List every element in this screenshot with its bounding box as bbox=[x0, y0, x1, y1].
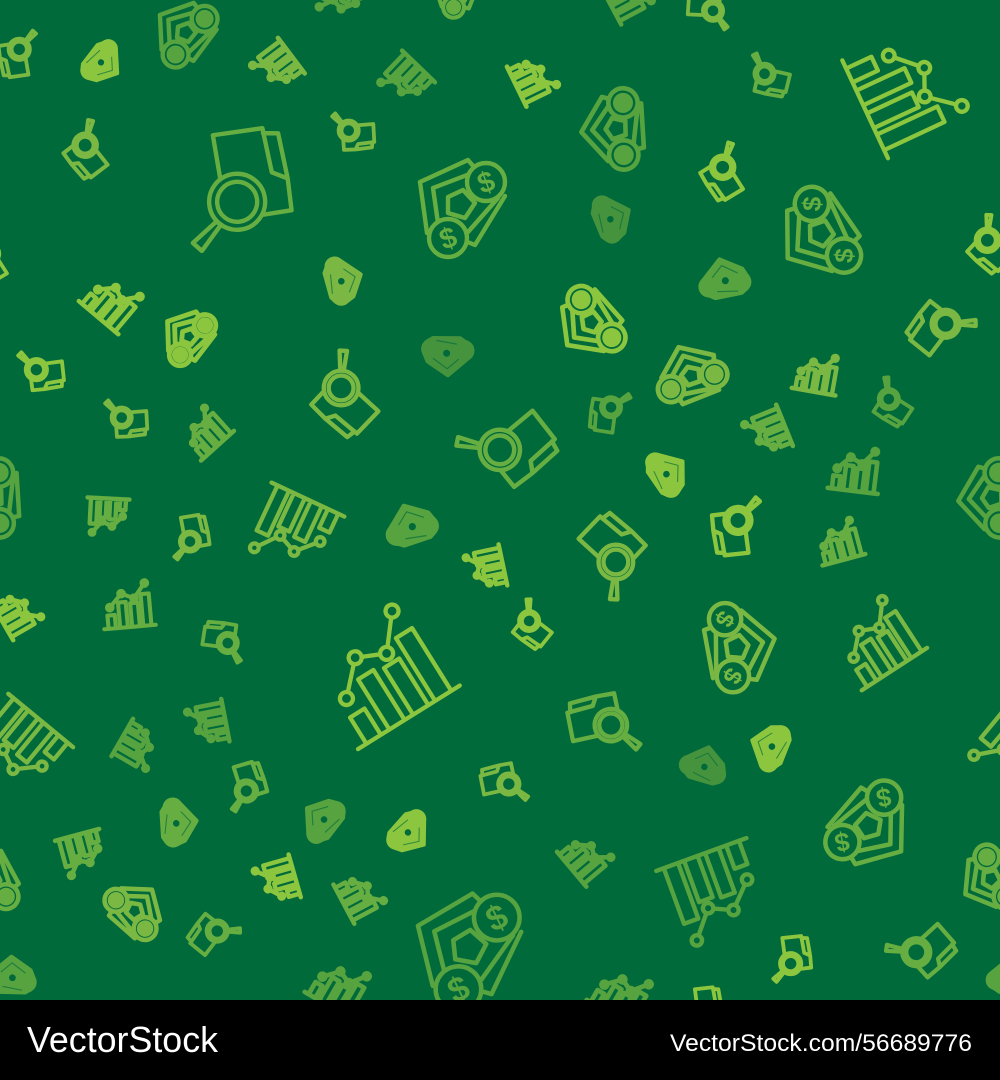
icon: folder search bbox=[686, 0, 731, 30]
icon: money shield bbox=[155, 0, 219, 71]
icon: bar chart bbox=[557, 826, 617, 887]
icon: bar chart large bbox=[302, 596, 460, 749]
icon: bar chart bottom bbox=[305, 951, 375, 1019]
icon: folder search bbox=[0, 30, 41, 78]
icon: money shield edge right bbox=[949, 451, 1000, 547]
icon: money shield large bbox=[420, 160, 505, 257]
icon: money shield bbox=[648, 335, 734, 423]
icon: folder search bbox=[200, 620, 247, 663]
icon: folder search bbox=[18, 349, 65, 391]
icon: bar chart bbox=[111, 719, 166, 775]
icon: folder search edge bbox=[0, 230, 18, 287]
icon: money shield small bbox=[692, 252, 756, 315]
icon: folder search bottom bbox=[683, 987, 723, 1031]
icon: folder search bbox=[185, 905, 242, 963]
icon: folder search bbox=[903, 290, 979, 366]
icon: bar chart edge left bbox=[0, 694, 73, 804]
icon: money shield edge left bbox=[0, 951, 41, 1009]
icon: folder search bbox=[332, 112, 375, 150]
icon: bar chart bbox=[251, 855, 301, 908]
icon: money shield small bbox=[309, 251, 368, 310]
icon: bar chart bbox=[242, 483, 344, 581]
icon: money shield small bbox=[417, 321, 480, 381]
icon: bar chart bbox=[86, 497, 129, 536]
icon: folder search bbox=[221, 760, 270, 812]
icon: money shield small bbox=[385, 805, 430, 855]
icon: bar chart bbox=[656, 838, 775, 950]
icon: money shield bbox=[770, 180, 880, 286]
icon: money shield small bbox=[578, 190, 637, 248]
icon: money shield edge left bbox=[0, 451, 43, 547]
icon: folder search bbox=[298, 347, 393, 442]
icon: money shield bbox=[163, 309, 217, 369]
icon: folder search bbox=[958, 212, 1000, 277]
icon: folder search bbox=[453, 391, 563, 500]
icon: money shield bbox=[99, 882, 165, 942]
icon: folder search bbox=[479, 761, 529, 807]
icon: bar chart bbox=[824, 590, 927, 690]
icon: money shield edge right bbox=[981, 951, 1000, 1009]
icon: bar chart bbox=[828, 444, 883, 494]
footer logo text: VectorStock bbox=[27, 1019, 219, 1060]
icon: bar chart bbox=[175, 402, 234, 461]
icon: bar chart top bbox=[600, 0, 657, 24]
icon: bar chart bbox=[333, 866, 389, 924]
icon: money shield bbox=[552, 282, 637, 361]
icon: folder search bbox=[588, 388, 631, 435]
icon: bar chart bbox=[462, 544, 507, 593]
icon: folder search bbox=[56, 118, 119, 182]
icon: money shield small bbox=[676, 744, 728, 793]
icon: money shield bbox=[822, 773, 912, 871]
icon: folder search bbox=[169, 514, 211, 560]
icon: folder search bbox=[884, 911, 960, 987]
icon: bar chart large bbox=[842, 20, 974, 158]
icon: money shield small bbox=[145, 792, 203, 851]
icon: folder search bbox=[105, 399, 148, 437]
icon: money shield edge right bbox=[953, 839, 1000, 919]
footer image id text: VectorStock.com/56689776 bbox=[670, 1030, 972, 1057]
icon: money shield small bbox=[303, 798, 347, 847]
icon: folder search bbox=[566, 690, 641, 760]
icon: bar chart bottom bbox=[587, 959, 657, 1027]
icon: money shield edge left bbox=[0, 839, 35, 919]
icon: bar chart bbox=[100, 580, 156, 629]
icon: bar chart bbox=[184, 699, 229, 749]
icon: folder search bbox=[711, 497, 764, 556]
icon: bar chart top bbox=[312, 0, 369, 25]
icon: folder search bbox=[865, 375, 920, 429]
icon: money shield top bbox=[431, 0, 486, 20]
icon: money shield small bbox=[379, 497, 443, 562]
icon: money shield small bbox=[750, 723, 797, 774]
icon: folder search bbox=[770, 935, 812, 982]
icon: bar chart bbox=[55, 829, 109, 880]
icon: folder search bbox=[694, 141, 755, 204]
icon: money shield bbox=[678, 591, 787, 701]
footer bar bbox=[0, 1000, 1000, 1080]
icon: bar chart bbox=[792, 349, 842, 396]
icon: folder search bbox=[744, 53, 793, 99]
icon: bar chart bbox=[79, 266, 148, 334]
icon: money shield small bbox=[79, 37, 121, 83]
icon: bar chart bbox=[374, 51, 435, 111]
icon: bar chart bbox=[740, 405, 793, 461]
icon: money shield small bbox=[635, 447, 692, 501]
icon: folder search bbox=[564, 508, 659, 603]
icon: bar chart bbox=[0, 584, 46, 640]
icon: money shield large bottom bbox=[415, 889, 529, 1015]
icon: folder search bbox=[505, 597, 560, 652]
icon: money shield bbox=[572, 81, 668, 179]
icon: bar chart bbox=[507, 50, 562, 107]
icon: folder search large bbox=[180, 126, 295, 252]
icon: bar chart edge right bbox=[961, 694, 1000, 804]
icon: bar chart bbox=[247, 38, 305, 97]
icon: bar chart bbox=[812, 516, 865, 565]
